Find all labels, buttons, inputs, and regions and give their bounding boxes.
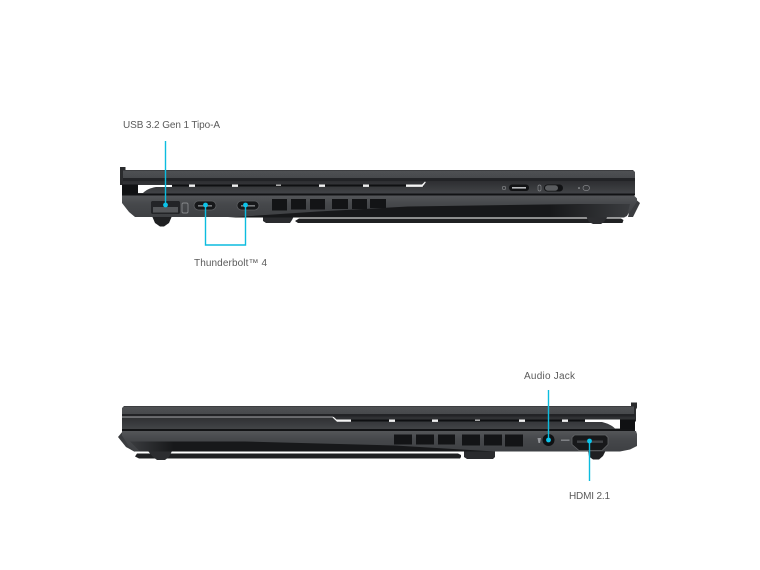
power switch xyxy=(544,184,563,192)
audio jack port xyxy=(542,434,554,446)
feet xyxy=(152,216,172,226)
display band xyxy=(123,181,635,194)
vents xyxy=(394,434,523,446)
hinge cut-out: black block xyxy=(122,184,138,194)
rear stand xyxy=(295,218,624,223)
laptop: left side view xyxy=(120,167,640,226)
audio icon xyxy=(538,438,541,443)
base shadow wedge xyxy=(228,204,630,218)
hinge nub xyxy=(631,402,637,422)
slot line xyxy=(172,184,424,186)
hdmi port xyxy=(572,435,608,450)
usb-c port on display xyxy=(509,184,529,191)
feet xyxy=(148,451,172,460)
usb-a port xyxy=(151,201,180,214)
callout: Thunderbolt 4 xyxy=(194,203,267,269)
base shadow wedge xyxy=(130,442,495,452)
hdmi label xyxy=(561,440,570,441)
callout: USB 3.2 Gen 1 Tipo-A xyxy=(123,120,220,207)
rear stand xyxy=(135,454,461,458)
lid xyxy=(122,406,634,414)
thin light line xyxy=(122,416,333,418)
thunderbolt port 2 xyxy=(237,201,259,210)
slot highlights xyxy=(332,417,351,422)
hinge cut-out: black block xyxy=(620,420,635,429)
slot line xyxy=(351,420,585,422)
hinge cut-out: white gap xyxy=(585,420,620,428)
hinge cut-out: white gap xyxy=(138,185,172,193)
base xyxy=(122,196,637,217)
display band xyxy=(122,416,635,430)
vents xyxy=(272,199,386,210)
hinge nub xyxy=(120,167,126,185)
laptop: right side view xyxy=(118,402,637,460)
slot highlights xyxy=(189,184,195,187)
usb icon xyxy=(182,203,188,213)
thunderbolt port 1 xyxy=(194,201,216,210)
callout: HDMI 2.1: HDMI 2.1 xyxy=(569,491,610,502)
callout: Thunderbolt 4: Thunderbolt™ 4 xyxy=(194,258,267,269)
callout: Audio Jack: Audio Jack xyxy=(524,371,576,382)
hinge line xyxy=(122,194,635,196)
callout: Audio Jack xyxy=(524,371,576,442)
lid xyxy=(123,170,635,178)
hinge line xyxy=(122,429,635,431)
callout: USB 3.2 Gen 1 Tipo-A: USB 3.2 Gen 1 Tipo-A xyxy=(123,120,220,131)
rear wedge xyxy=(628,197,640,217)
indicators xyxy=(502,186,506,190)
callout: HDMI 2.1 xyxy=(569,439,610,502)
base xyxy=(122,431,637,452)
rear wedge xyxy=(118,431,135,452)
